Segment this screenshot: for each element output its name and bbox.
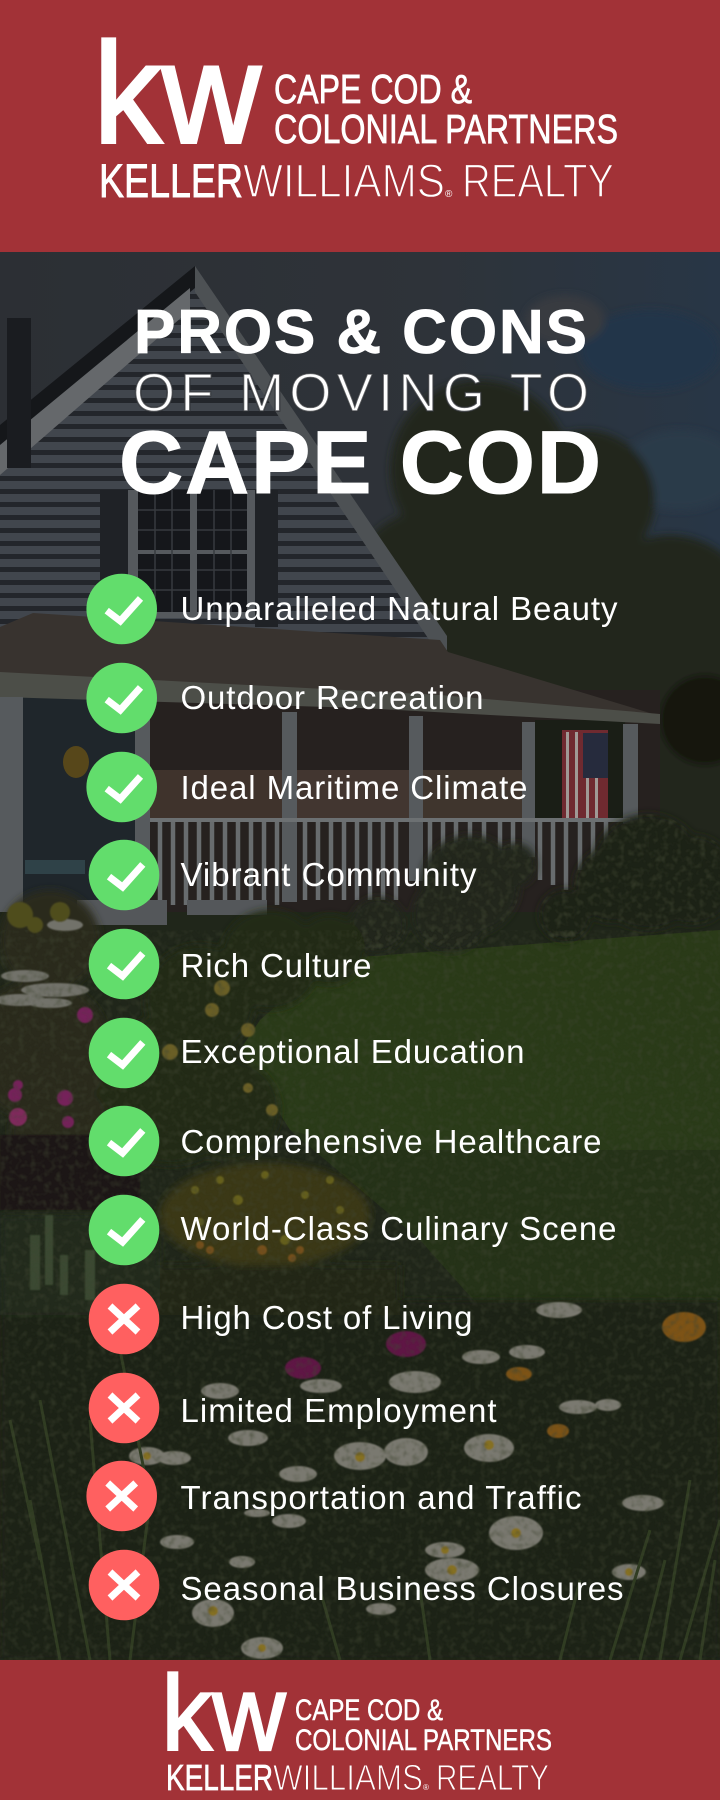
pro: Exceptional Education: Exceptional Education (180, 1033, 524, 1070)
logo: Keller Williams Realty: ® (445, 189, 453, 200)
title: PROS & CONS (134, 298, 587, 367)
shrub noise texture (362, 814, 720, 946)
porch (0, 690, 660, 915)
con: Seasonal Business Closures: Seasonal Business Closures (180, 1570, 624, 1607)
logo: Keller Williams Realty: KELLER (99, 154, 243, 207)
pro: Ideal Maritime Climate (86, 752, 528, 822)
pro: Rich Culture: Rich Culture (180, 947, 372, 984)
footer logo: kw mark: kw (162, 1653, 286, 1773)
pro: Comprehensive Healthcare (89, 1106, 601, 1176)
flag (562, 730, 608, 820)
pro: Ideal Maritime Climate: Ideal Maritime Climate (180, 769, 528, 806)
pro: World-Class Culinary Scene (89, 1195, 616, 1265)
title: OF MOVING TO (133, 363, 589, 423)
logo: team name (274, 66, 618, 152)
logo: kw mark: kw (94, 14, 261, 174)
pro: World-Class Culinary Scene: World-Class Culinary Scene (180, 1210, 616, 1247)
railing (150, 818, 630, 822)
title: CAPE COD (119, 412, 601, 512)
ground base (0, 912, 720, 1660)
pro: Unparalleled Natural Beauty (86, 574, 618, 644)
logo: team name: CAPE COD & (274, 66, 472, 112)
footer logo: team name: COLONIAL PARTNERS (295, 1724, 552, 1757)
footer logo: Keller Williams Realty: ® (423, 1783, 429, 1792)
footer logo: Keller Williams Realty (166, 1757, 549, 1798)
con: Limited Employment (89, 1373, 496, 1443)
footer logo: team name (295, 1694, 552, 1757)
pro: Outdoor Recreation (86, 663, 484, 733)
pro: Rich Culture (89, 929, 371, 999)
con: Transportation and Traffic: Transportation and Traffic (180, 1479, 582, 1516)
con: Transportation and Traffic (86, 1461, 582, 1531)
top banner (0, 0, 720, 252)
house siding (0, 268, 445, 660)
foliage noise texture (0, 930, 720, 1660)
logo: Keller Williams Realty (99, 154, 614, 207)
logo: Keller Williams Realty: REALTY (462, 154, 614, 207)
footer logo: Keller Williams Realty: WILLIAMS (273, 1757, 423, 1798)
pro: Exceptional Education (89, 1018, 524, 1088)
flower bed colours (0, 919, 89, 1008)
logo: Keller Williams Realty: WILLIAMS (243, 154, 445, 207)
pro: Vibrant Community: Vibrant Community (180, 856, 477, 893)
daisies (129, 1302, 664, 1659)
background photo: house and garden (0, 252, 720, 1660)
pro: Unparalleled Natural Beauty: Unparalleled Natural Beauty (180, 590, 618, 627)
bottom banner (0, 1653, 720, 1800)
footer logo: team name: CAPE COD & (295, 1694, 443, 1727)
con: High Cost of Living: High Cost of Living (180, 1299, 472, 1336)
pro: Comprehensive Healthcare: Comprehensive Healthcare (180, 1123, 602, 1160)
con: Limited Employment: Limited Employment (180, 1392, 496, 1429)
title (119, 298, 601, 512)
footer logo: Keller Williams Realty: REALTY (436, 1757, 549, 1798)
footer logo: Keller Williams Realty: KELLER (166, 1757, 273, 1798)
pro: Outdoor Recreation: Outdoor Recreation (180, 679, 484, 716)
window (128, 490, 255, 617)
foliage blades (10, 1350, 720, 1660)
shrubs and lawn (240, 930, 720, 1500)
con: Seasonal Business Closures (89, 1550, 623, 1620)
con: High Cost of Living (89, 1284, 472, 1354)
logo: team name: COLONIAL PARTNERS (274, 106, 618, 152)
pro: Vibrant Community (89, 840, 477, 910)
